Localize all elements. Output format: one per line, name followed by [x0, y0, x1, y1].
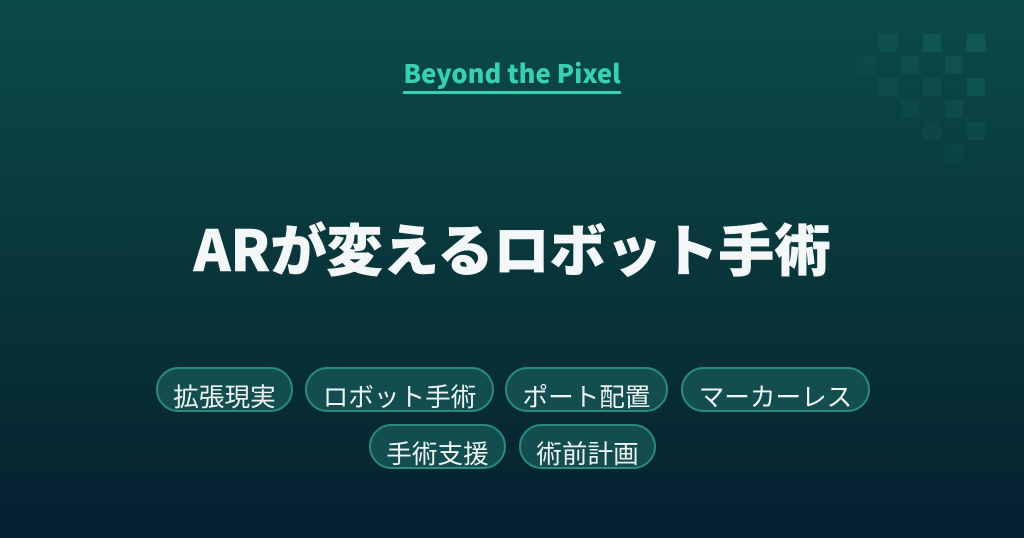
- tag: 術前計画: [519, 424, 656, 469]
- tag: マーカーレス: [681, 367, 870, 412]
- title: ARが変えるロボット手術: [193, 207, 831, 288]
- tag: 拡張現実: 拡張現実: [173, 377, 276, 414]
- tag: ポート配置: [505, 367, 668, 412]
- eyebrow label: Beyond the Pixel: Beyond the Pixel: [403, 54, 621, 91]
- tag: 手術支援: [369, 424, 506, 469]
- tag: 拡張現実: [156, 367, 293, 412]
- tag: ロボット手術: [305, 367, 494, 412]
- decorative pixel pattern: [879, 34, 985, 140]
- tag: ロボット手術: ロボット手術: [323, 377, 476, 414]
- tag: 術前計画: 術前計画: [536, 434, 639, 471]
- tag: 手術支援: 手術支援: [386, 434, 489, 471]
- tag group: [156, 367, 870, 471]
- tag: ポート配置: ポート配置: [522, 377, 650, 414]
- tag: マーカーレス: マーカーレス: [699, 377, 852, 414]
